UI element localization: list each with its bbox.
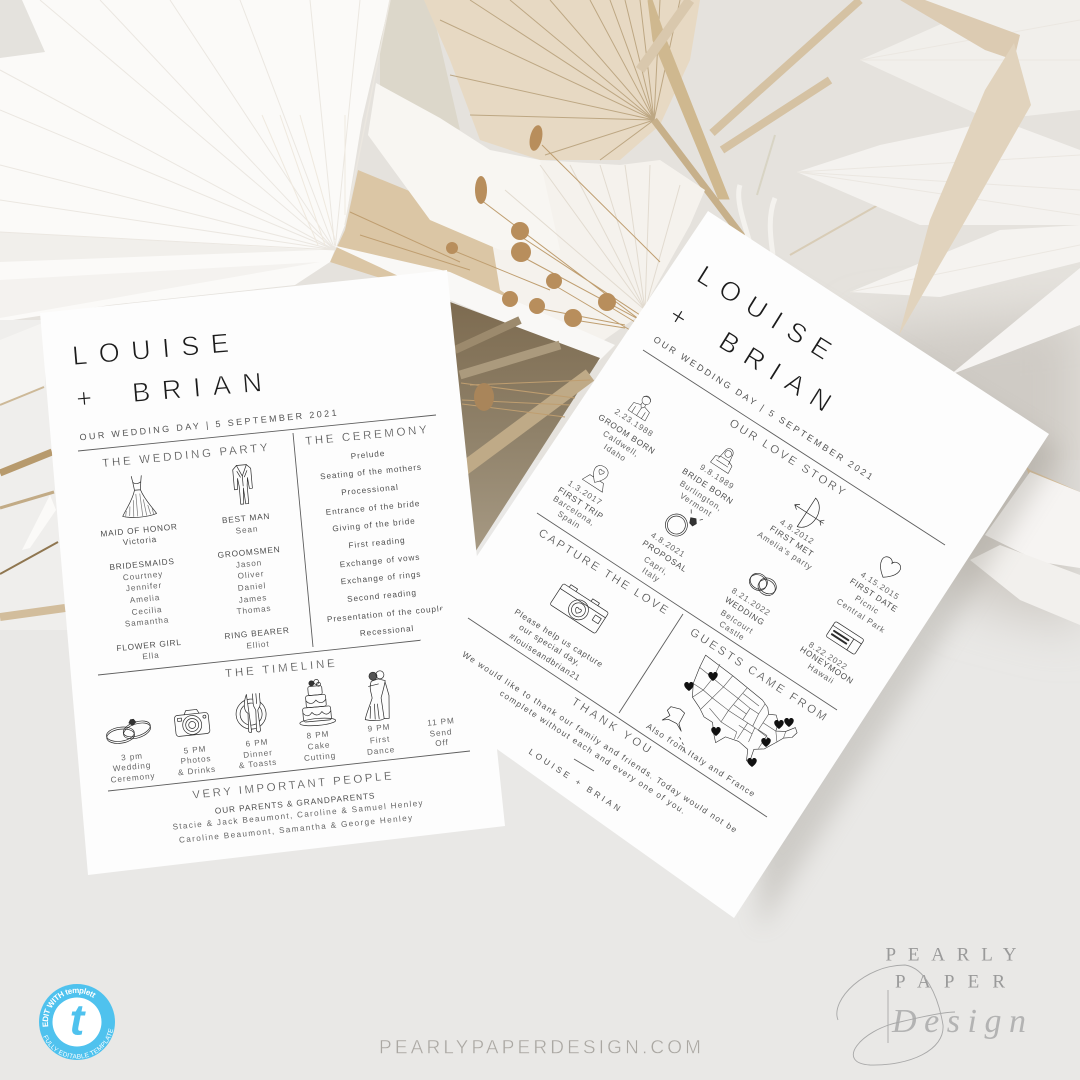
text: first date: 4.15.2015	[859, 570, 901, 602]
labels: timeline events: 9 PM	[367, 722, 391, 734]
icon: bow and arrow	[785, 490, 833, 538]
text: first trip	[551, 479, 606, 531]
heading: thank you: THANK YOU	[569, 696, 653, 756]
icon: tuxedo suit	[232, 464, 254, 505]
list: ceremony order: Exchange of vows	[339, 553, 421, 569]
labels: timeline events: 8 PM	[306, 729, 330, 741]
labels: timeline events: Dance	[367, 745, 395, 757]
list: ceremony order: Entrance of the bride	[325, 499, 421, 517]
badge: edit with templett	[39, 984, 115, 1060]
text: first date: FIRST DATE	[848, 576, 900, 614]
labels: timeline events: First	[369, 735, 391, 745]
background: white palm leaf right	[797, 0, 1080, 375]
logo: Pearly Paper Design	[837, 944, 1026, 1065]
text: groom born: Idaho	[602, 442, 628, 464]
text: best man	[221, 511, 271, 536]
panel: thank you	[461, 649, 739, 835]
text: thank you message: complete without each and every one of you.	[498, 688, 688, 816]
panel: the timeline	[105, 658, 455, 785]
icon: bride portrait	[710, 444, 740, 474]
labels: timeline events: Off	[435, 738, 449, 748]
icon: groom portrait	[628, 391, 657, 421]
list: ceremony order: Giving of the bride	[332, 517, 416, 533]
text: bride born: BRIDE BORN	[680, 466, 736, 506]
text: proposal: 4.8.2021	[649, 531, 687, 559]
icon: heart	[874, 555, 903, 583]
panel: our love story	[551, 391, 903, 686]
text: bridesmaids: Samantha	[124, 615, 170, 629]
text: groomsmen: Daniel	[237, 581, 267, 593]
text: groomsmen: GROOMSMEN	[217, 544, 281, 560]
heading: wedding party: THE WEDDING PARTY	[102, 442, 269, 470]
background: dried stems and seed pods	[350, 124, 660, 417]
card: love story right	[396, 211, 1049, 918]
background: white palm leaf left	[0, 0, 390, 322]
text: first trip: FIRST TRIP	[556, 485, 606, 521]
icon: wedding bands	[746, 569, 779, 599]
logo: Pearly Paper Design: PEARLY	[886, 944, 1017, 966]
logo: Pearly Paper Design: Design	[891, 1003, 1026, 1040]
labels: timeline events: Photos	[180, 754, 212, 766]
text: groomsmen	[217, 544, 281, 616]
text: honeymoon: HONEYMOON	[798, 644, 856, 686]
text: first date: Central Park	[835, 597, 887, 635]
text: first trip: Barcelona,	[551, 494, 597, 528]
text: bridesmaids	[109, 556, 175, 629]
text: maid of honor	[100, 521, 178, 547]
icon: wedding rings	[105, 717, 153, 745]
labels: timeline events: 6 PM	[245, 737, 269, 749]
background: white ribbon right	[970, 465, 1080, 625]
list: ceremony order: Presentation of the couple	[327, 604, 445, 624]
title: Louise + Brian: LOUISE	[692, 260, 837, 366]
date line: OUR WEDDING DAY | 5 SEPTEMBER 2021	[79, 408, 337, 442]
icon: alaska and hawaii	[653, 704, 704, 753]
title: Louise + Brian: BRIAN	[714, 326, 837, 418]
text: groomsmen: Jason	[235, 558, 263, 570]
icon: guest hearts	[684, 672, 794, 767]
icon: wedding cake	[296, 678, 336, 727]
icon: boarding pass	[826, 621, 864, 655]
badge: edit with templett: EDIT WITH templett	[42, 988, 96, 1027]
text: bride born	[678, 463, 736, 519]
text: flower girl: Ella	[142, 651, 160, 661]
text: wedding: 8.21.2022	[730, 586, 772, 618]
labels: timeline events: & Toasts	[238, 758, 278, 770]
text: bride born: Vermont	[678, 491, 714, 519]
labels: timeline events: 3 pm	[121, 751, 143, 763]
text: first trip: Spain	[556, 509, 582, 531]
text: bridesmaids: Cecilia	[131, 605, 163, 617]
text: parents and grandparents	[172, 790, 424, 845]
icon: engagement ring	[661, 501, 704, 545]
map: united states with guest hearts	[653, 655, 805, 777]
text: signature: LOUISE + BRIAN	[527, 746, 623, 814]
panel: the ceremony	[305, 424, 445, 638]
text: ring bearer: RING BEARER	[224, 625, 290, 641]
text: best man: BEST MAN	[221, 511, 271, 525]
icon: map pin with heart	[582, 460, 615, 492]
labels: timeline events: Cake	[307, 740, 331, 752]
title: Louise + Brian: +	[664, 300, 693, 333]
labels: timeline events: 11 PM	[427, 716, 455, 728]
section dividers	[78, 415, 470, 791]
background: tan grasses under palm tip	[330, 170, 560, 330]
text: groom born: Caldwell,	[601, 429, 641, 459]
title: Louise + Brian	[664, 260, 837, 418]
text: flower girl: FLOWER GIRL	[116, 637, 182, 653]
text: best man: Sean	[235, 524, 259, 536]
text: maid of honor: MAID OF HONOR	[100, 521, 178, 539]
website address: PEARLYPAPERDESIGN.COM	[379, 1038, 701, 1058]
card: wedding program left	[40, 270, 505, 875]
text: groomsmen: James	[238, 593, 268, 605]
text: flower girl	[116, 637, 182, 661]
text: parents and grandparents: OUR PARENTS & GRANDPARENTS	[214, 790, 376, 816]
text: ring bearer: Elliot	[246, 639, 270, 651]
text: proposal	[640, 531, 689, 584]
text: wedding: Castle	[718, 619, 746, 643]
text: proposal: PROPOSAL	[641, 538, 689, 574]
title: Louise + Brian: +	[75, 383, 93, 414]
icon: film camera	[550, 581, 610, 634]
title: Louise + Brian: BRIAN	[131, 367, 263, 408]
background: grey corner and gap behind left palm	[0, 0, 460, 130]
text: capture instructions: #louiseandbrian21	[508, 631, 582, 683]
background: left edge leaves and stems	[0, 320, 70, 630]
heading: capture the love: CAPTURE THE LOVE	[536, 527, 670, 617]
panel: guests came from	[645, 626, 828, 799]
labels: timeline events: Send	[429, 727, 453, 739]
text: wedding: Belcourt	[719, 608, 755, 636]
date line: OUR WEDDING DAY | 5 SEPTEMBER 2021	[652, 334, 874, 482]
labels: timeline events	[110, 716, 455, 785]
labels: timeline events: Ceremony	[110, 771, 156, 785]
text: first date	[835, 570, 901, 635]
list: ceremony order	[320, 449, 445, 638]
text: bridesmaids: Courtney	[122, 570, 164, 582]
text: groomsmen: Oliver	[237, 569, 265, 581]
logo: Pearly Paper Design: PAPER	[895, 972, 1005, 992]
list: ceremony order: Processional	[341, 483, 399, 497]
list: ceremony order: Second reading	[347, 588, 417, 604]
text: honeymoon: Hawaii	[806, 662, 836, 686]
text: capture instructions: Please help us capture	[513, 607, 605, 669]
icon: camera	[174, 708, 210, 737]
text: bridesmaids: Jennifer	[125, 581, 163, 593]
labels: timeline events: Cutting	[304, 751, 336, 763]
text: groom born: 2.23.1988	[613, 407, 655, 439]
text: first met: Amelia's party	[756, 530, 814, 572]
text: honeymoon: 8.22.2022	[807, 640, 849, 672]
background: dried tan palm fan	[424, 0, 878, 255]
section dividers	[468, 350, 945, 817]
text: also from: Also from Italy and France	[645, 721, 757, 799]
panel: very important people	[172, 770, 424, 845]
text: first trip: 1.3.2017	[566, 479, 604, 507]
background: brown shadow wedge behind cards	[440, 302, 600, 560]
text: capture instructions: our special day,	[517, 622, 583, 668]
text: parents and grandparents: Caroline Beaumont, Samantha & George Henley	[179, 813, 413, 845]
list: ceremony order: Recessional	[359, 624, 415, 638]
labels: timeline events: 5 PM	[183, 744, 207, 756]
text: groom born: GROOM BORN	[597, 412, 657, 456]
panel: the wedding party	[100, 442, 290, 661]
labels: timeline events: & Drinks	[178, 765, 216, 777]
heading: our love story: OUR LOVE STORY	[727, 417, 847, 499]
text: first date: Picnic	[853, 594, 881, 616]
panel: capture the love	[508, 527, 670, 683]
list: ceremony order: Exchange of rings	[340, 570, 422, 586]
text: bridesmaids: Amelia	[129, 593, 161, 605]
title: Louise + Brian: LOUISE	[71, 328, 230, 371]
text: first met: 4.8.2012	[778, 518, 816, 546]
background: white palm leaf centre with ribbon	[332, 83, 705, 362]
text: bridesmaids: BRIDESMAIDS	[109, 556, 175, 572]
labels: timeline events: Wedding	[112, 761, 152, 773]
shadow under right card	[740, 260, 1060, 930]
heading: the timeline: THE TIMELINE	[225, 658, 336, 680]
list: ceremony order: First reading	[348, 536, 406, 550]
text: proposal: Italy	[640, 566, 662, 584]
badge: edit with templett: t	[70, 996, 87, 1044]
text: parents and grandparents: Stacie & Jack Beaumont, Caroline & Samuel Henley	[172, 798, 424, 832]
heading: guests came from: GUESTS CAME FROM	[688, 626, 828, 724]
list: ceremony order: Seating of the mothers	[320, 463, 422, 481]
text: maid of honor: Victoria	[122, 535, 158, 547]
heading: very important people: VERY IMPORTANT PEOPLE	[192, 770, 392, 802]
text: groomsmen: Thomas	[236, 604, 272, 616]
text: wedding	[718, 586, 772, 643]
text: proposal: Capri,	[642, 555, 670, 577]
labels: timeline events: Dinner	[243, 748, 273, 760]
badge: edit with templett: FULLY EDITABLE TEMPLATE	[43, 1028, 114, 1059]
heading: the ceremony: THE CEREMONY	[305, 424, 428, 448]
text: bride born: 9.8.1989	[698, 463, 736, 491]
text: thank you message: We would like to thank our family and friends. Today would not be	[461, 649, 739, 835]
title: Louise + Brian	[71, 328, 263, 414]
icon: dancing couple	[363, 670, 390, 721]
icon: plate and cutlery	[234, 693, 268, 734]
text: ring bearer	[224, 625, 290, 651]
text: first met: FIRST MET	[768, 523, 816, 559]
list: ceremony order: Prelude	[350, 449, 386, 461]
text: wedding: WEDDING	[723, 594, 767, 628]
icon: wedding dress	[119, 475, 157, 519]
text: bride born: Burlington,	[678, 479, 724, 513]
